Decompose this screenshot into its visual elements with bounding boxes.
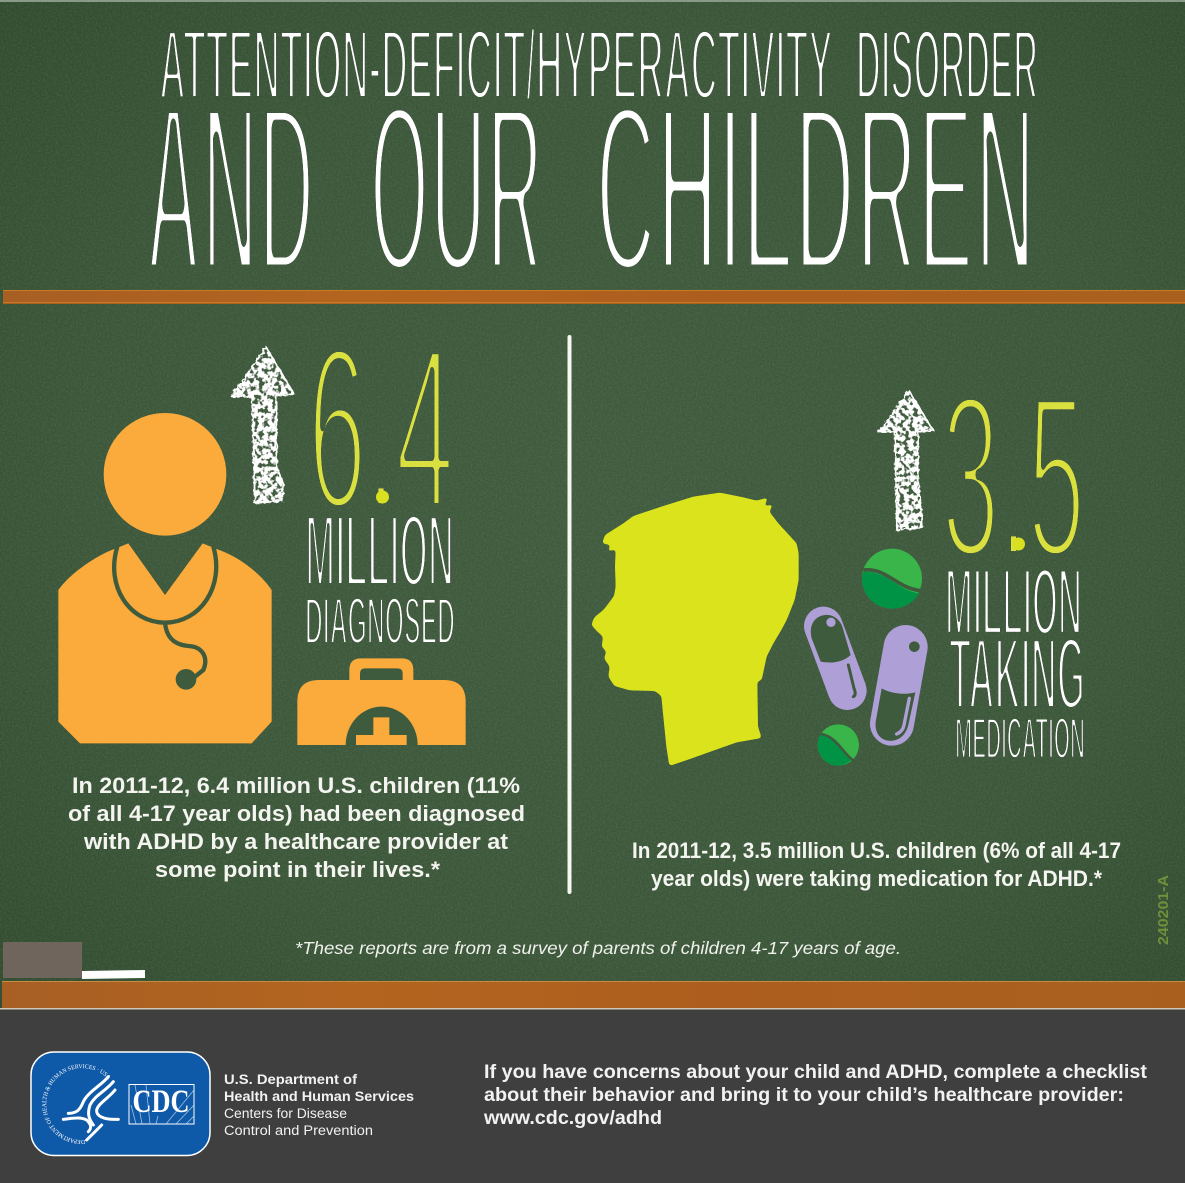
agency names: Health and Human Services — [224, 1089, 414, 1105]
agency names: U.S. Department of — [224, 1072, 357, 1088]
icon: capsule right — [876, 641, 920, 741]
call to action: www.cdc.gov/adhd — [483, 1108, 662, 1129]
vertical divider — [568, 337, 572, 892]
text: 6.4 — [308, 299, 454, 557]
icon: doctor with stethoscope — [58, 413, 272, 743]
agency names: Control and Prevention — [224, 1123, 373, 1139]
footer band — [0, 1008, 1185, 1183]
eraser — [3, 942, 82, 978]
chalk arrow up (left) — [232, 347, 294, 503]
stat: 6.4 — [308, 299, 454, 557]
bottom chalk ledge — [2, 981, 1185, 1008]
top chalk ledge — [3, 290, 1185, 304]
chalk stick — [82, 970, 145, 979]
title: AND — [145, 49, 315, 329]
text: medication description: year olds) were taking medication for ADHD.* — [651, 866, 1102, 891]
agency names — [224, 1072, 414, 1139]
agency names: Centers for Disease — [224, 1106, 347, 1122]
text: diagnosed description: of all 4-17 year olds) had been diagnosed — [68, 801, 525, 826]
text: diagnosed description — [68, 773, 525, 882]
text: diagnosed description: with ADHD by a healthcare provider at — [83, 829, 509, 854]
title — [145, 7, 1038, 329]
call to action: If you have concerns about your child and ADHD, complete a checklist — [484, 1062, 1148, 1083]
text: diagnosed description: some point in their lives.* — [155, 857, 440, 882]
CDC mark: CDC — [132, 1084, 190, 1120]
text: medication description — [632, 838, 1121, 891]
text: diagnosed description: In 2011-12, 6.4 million U.S. children (11% — [72, 773, 520, 798]
icon: round green pill large — [862, 549, 922, 609]
call to action: about their behavior and bring it to your child’s healthcare provider: — [484, 1085, 1124, 1106]
chalk arrow up (right) — [879, 391, 933, 530]
text: medication description: In 2011-12, 3.5 million U.S. children (6% of all 4-17 — [632, 838, 1121, 863]
title: OUR — [369, 49, 543, 329]
call to action — [483, 1062, 1148, 1129]
icon: medical kit — [297, 658, 466, 745]
label: million diagnosed — [305, 492, 455, 660]
stat: 3.5 — [942, 347, 1085, 605]
label: million taking medication — [945, 546, 1085, 772]
footnote: *These reports are from a survey of parents of children 4-17 years of age. — [295, 938, 901, 958]
logo: HHS CDC — [30, 1051, 211, 1156]
icon: round green pill small — [818, 724, 859, 766]
icon: pills — [811, 549, 922, 766]
icon: eagle — [63, 1077, 118, 1140]
seal text: DEPARTMENT OF HEALTH & HUMAN SERVICES · USA — [42, 1064, 110, 1144]
text: DIAGNOSED — [305, 582, 455, 660]
document number: 240201-A — [1156, 874, 1172, 945]
icon: capsule left — [811, 615, 855, 697]
text: MILLION — [305, 492, 454, 610]
icon: child head silhouette — [591, 493, 799, 766]
